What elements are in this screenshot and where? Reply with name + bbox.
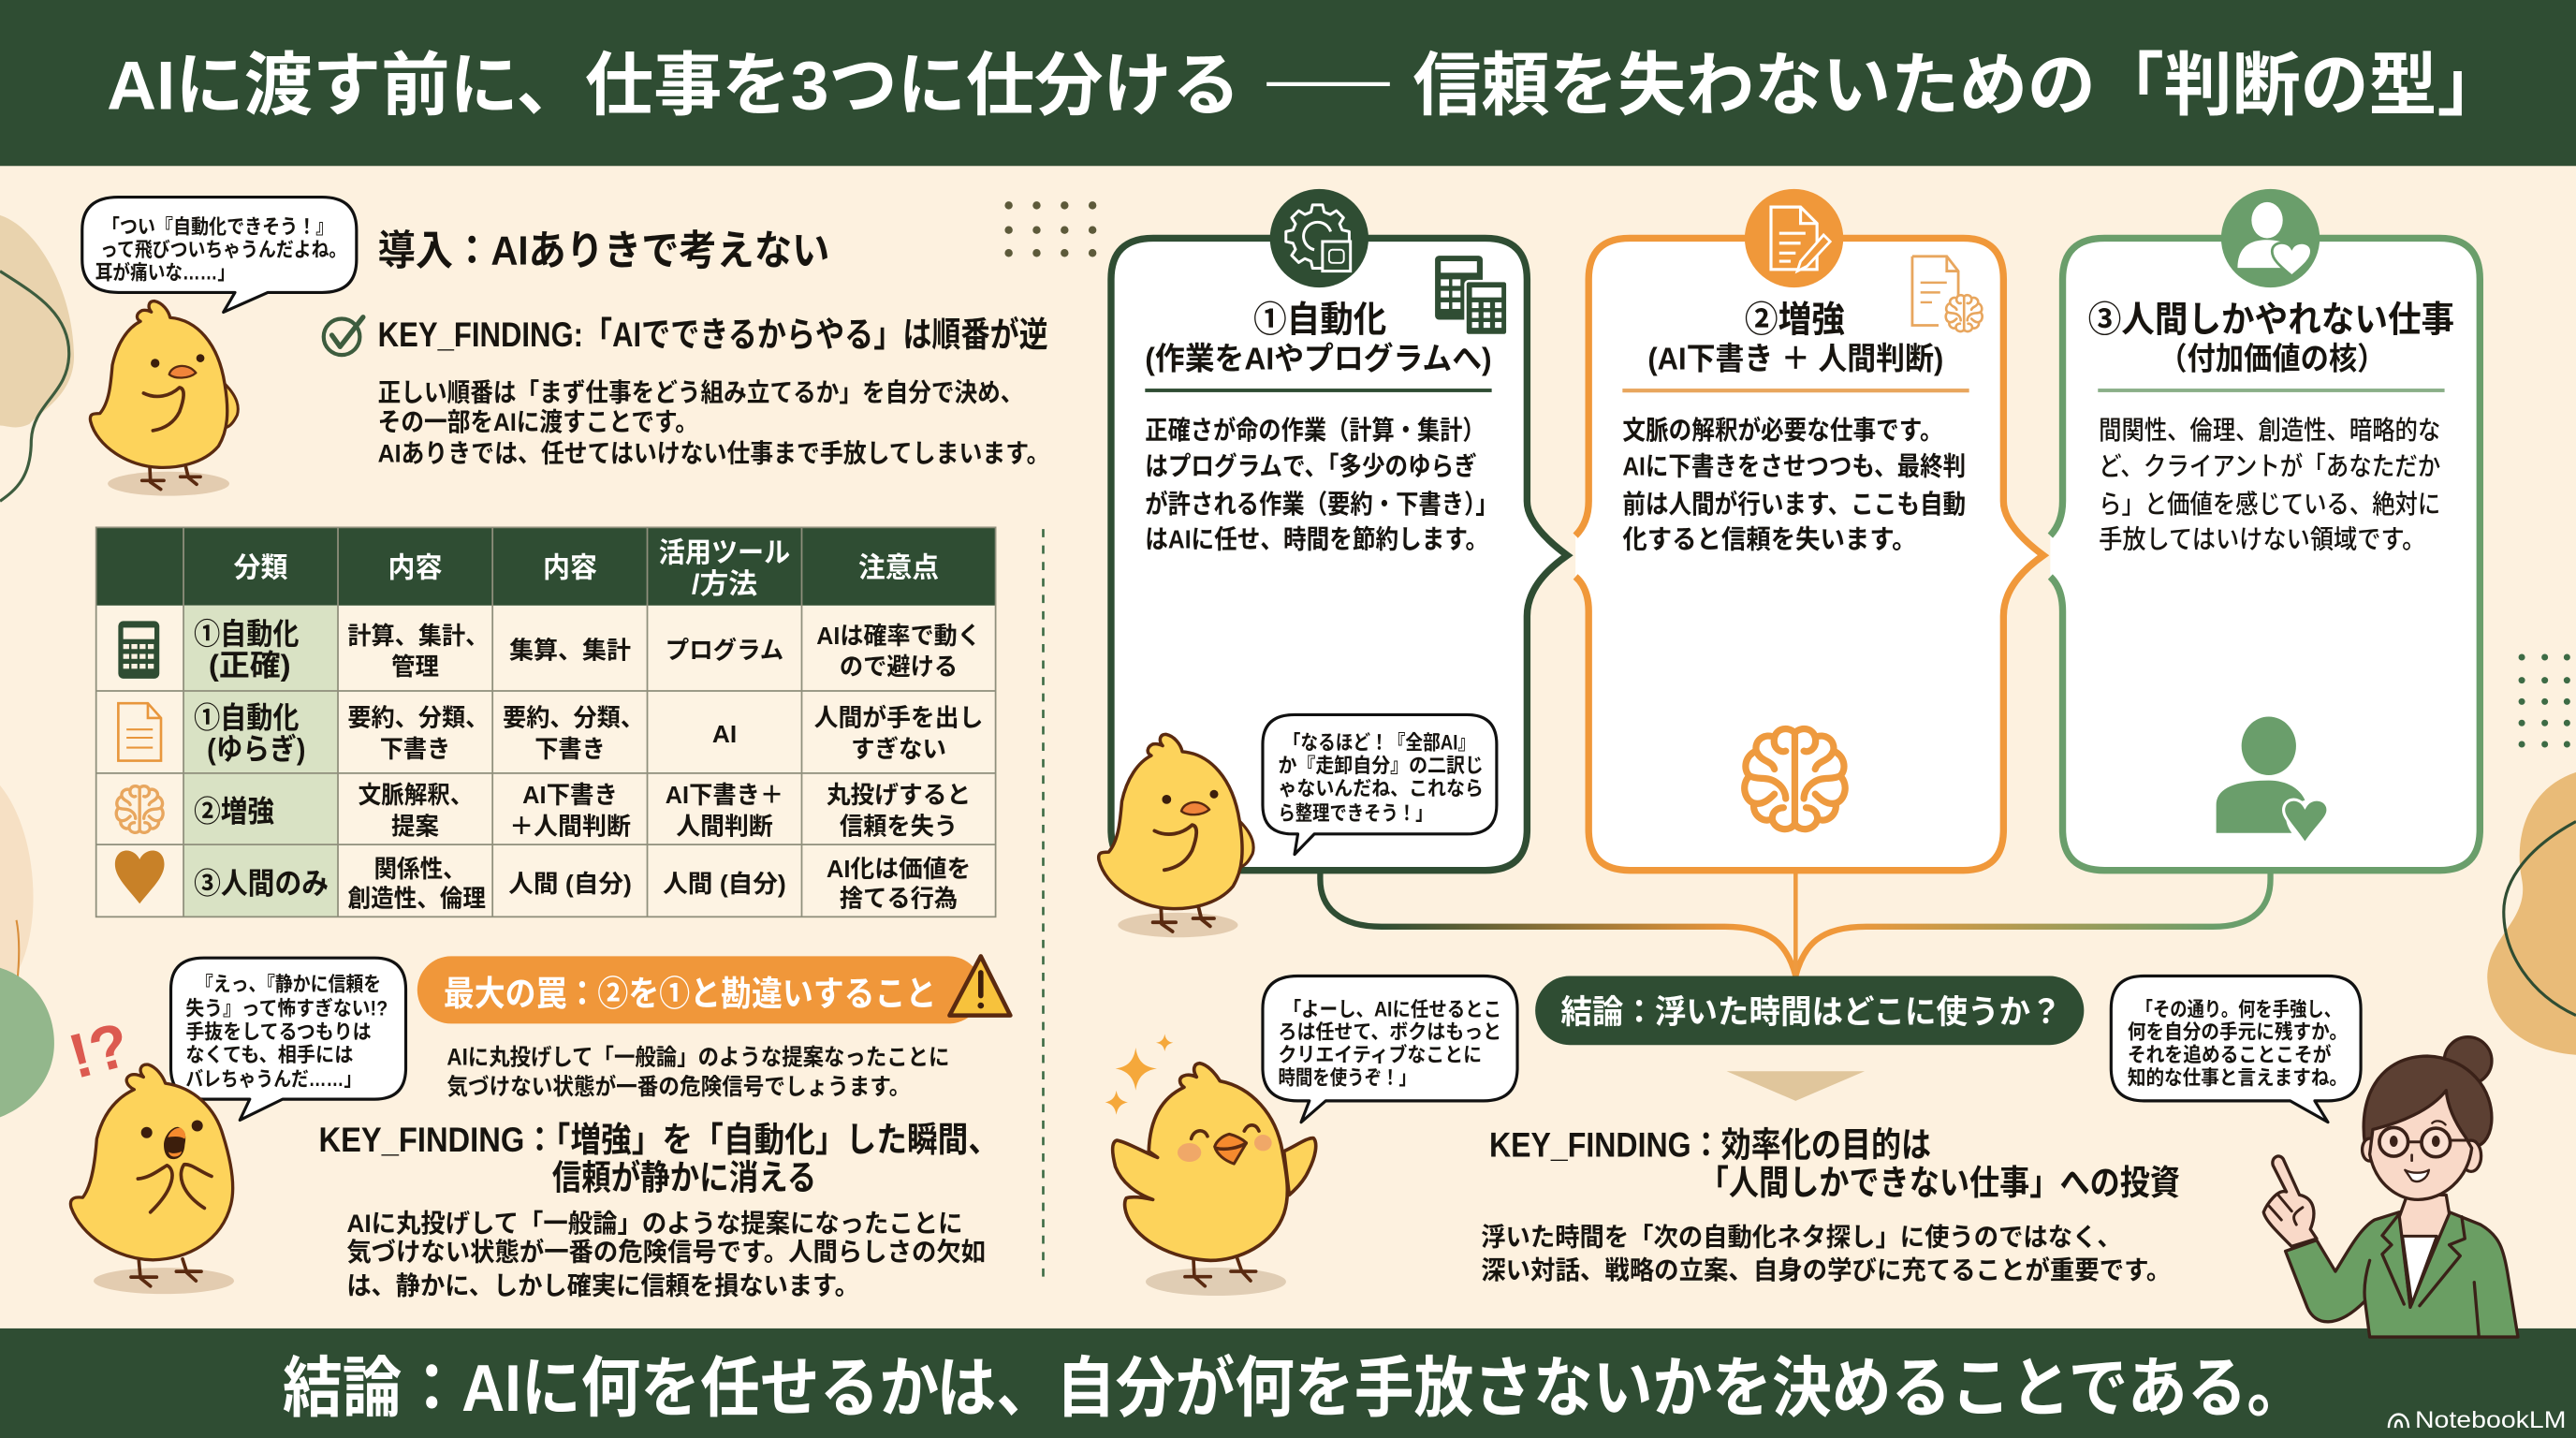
icon: sparkles <box>1105 1034 1173 1115</box>
row 2 <box>118 701 983 766</box>
icon: brain large <box>1745 729 1845 829</box>
row 2: AI <box>712 720 737 748</box>
icon: brain <box>116 786 163 832</box>
heading: ①自動化 <box>1253 300 1386 340</box>
vertical dashed divider <box>1042 529 1044 1282</box>
intro body <box>378 378 1050 468</box>
table header: 活用ツール <box>659 538 790 569</box>
row 1: 計算、集計、 <box>347 622 489 650</box>
row 1: AIは確率で動く <box>816 622 981 650</box>
row 2: すぎない <box>851 735 946 763</box>
icon: surprise marks: !? <box>62 1010 137 1093</box>
connector lines <box>1320 868 2271 976</box>
row 3: 信頼を失う <box>840 812 958 840</box>
speech bubble happy: クリエイティブなことに <box>1278 1043 1482 1066</box>
panel: augmentation <box>1575 189 2043 871</box>
speech bubble surprised: 『えっ、『静かに信頼を <box>196 972 381 995</box>
intro body: 正しい順番は「まず仕事をどう組み立てるか」を自分で決め、 <box>378 378 1023 407</box>
heading: ②増強 <box>1745 300 1845 340</box>
row 2: 下書き <box>380 735 450 763</box>
body: AIに下書きをさせつつも、最終判 <box>1622 452 1966 481</box>
badge: document with pencil <box>1745 189 1843 287</box>
row 3: AI下書き <box>522 781 618 809</box>
intro body: その一部をAIに渡すことです。 <box>378 407 698 436</box>
icon: document <box>118 703 161 761</box>
row 2: 人間が手を出し <box>814 704 983 732</box>
icon: person with heart <box>2217 717 2328 844</box>
body: 文脈の解釈が必要な仕事です。 <box>1622 415 1943 445</box>
speech bubble happy: ろは任せて、ボクはもっと <box>1278 1020 1501 1043</box>
speech bubble surprised: なくても、相手には <box>185 1043 354 1066</box>
row 1: 集算、集計 <box>509 637 631 665</box>
check icon <box>324 317 363 355</box>
table header: 内容 <box>543 552 597 583</box>
body <box>2099 416 2440 554</box>
decorative blobs right <box>2487 772 2576 1055</box>
row 1: 管理 <box>391 653 439 681</box>
subheading: （付加価値の核） <box>2159 343 2385 376</box>
row 1: ので避ける <box>840 653 958 681</box>
trap body: AIに丸投げして「一般論」のような提案なったことに <box>446 1044 949 1070</box>
conclusion text: 結論：AIに何を任せるかは、自分が何を手放さないかを決めることである。 <box>283 1351 2306 1425</box>
row 1: ①自動化 <box>194 617 299 651</box>
row 3: 丸投げすると <box>827 781 971 809</box>
speech bubble teacher: 「その通り。何を手強し、 <box>2136 998 2341 1021</box>
key finding left: 信頼が静かに消える <box>552 1159 816 1197</box>
row 4: 捨てる行為 <box>840 885 958 913</box>
row 1: プログラム <box>666 637 783 665</box>
row 1 <box>118 617 981 682</box>
body: 間関性、倫理、創造性、暗略的な <box>2099 416 2440 445</box>
speech bubble thinking: か『走卸自分』の二訳じ <box>1278 754 1484 777</box>
icon: document and brain <box>1912 257 1983 331</box>
row 2: 下書き <box>534 735 606 763</box>
body: 手放してはいけない領域です。 <box>2099 525 2425 554</box>
row 3: 提案 <box>391 812 439 840</box>
table header: 内容 <box>388 552 443 583</box>
key finding right body: 深い対話、戦略の立案、自身の学びに充てることが重要です。 <box>1481 1255 2171 1284</box>
orange trap callout: 最大の罠：②を①と勘違いすること <box>444 975 936 1013</box>
body <box>1145 415 1499 554</box>
body: 化すると信頼を失います。 <box>1622 525 1917 554</box>
icon: heart <box>115 851 165 903</box>
dot grid right <box>2519 654 2570 748</box>
speech bubble teacher: 何を自分の手元に残すか。 <box>2128 1020 2348 1043</box>
speech bubble happy <box>1263 976 1517 1123</box>
row 4: AI化は価値を <box>827 855 971 883</box>
conclusion pill: 結論：浮いた時間はどこに使うか？ <box>1560 994 2062 1031</box>
row 2: 要約、分類、 <box>503 704 644 732</box>
row 4: 人間 (自分) <box>663 870 786 898</box>
body: はプログラムで、「多少のゆらぎ <box>1145 451 1477 481</box>
speech bubble intro <box>82 198 357 312</box>
conclusion pill <box>1535 976 2084 1045</box>
speech bubble thinking: ら整理できそう！」 <box>1278 801 1432 825</box>
key finding right <box>1489 1125 2180 1202</box>
speech bubble intro: 「つい『自動化できそう！』 <box>102 214 333 238</box>
key finding left: KEY_FINDING：「増強」を「自動化」した瞬間、 <box>318 1121 999 1159</box>
decorative blobs left <box>0 215 74 1117</box>
icon: warning triangle <box>949 956 1010 1016</box>
row 3: 文脈解釈、 <box>359 781 473 809</box>
title band: 信頼を失わないための「判断の型」 <box>1412 46 2506 124</box>
panel: automation <box>1111 189 1567 871</box>
key finding right body <box>1481 1223 2171 1284</box>
key finding left body: AIに丸投げして「一般論」のような提案になったことに <box>346 1209 962 1238</box>
trap body <box>446 1044 949 1100</box>
body: ど、クライアントが「あなただか <box>2099 452 2440 481</box>
speech bubble teacher: それを追めることこそが <box>2128 1043 2332 1066</box>
icon: calculator <box>118 621 159 679</box>
table header <box>234 538 939 600</box>
speech bubble happy: 「よーし、AIに任せるとこ <box>1283 998 1501 1021</box>
bottom conclusion band <box>0 1328 2576 1438</box>
table header: /方法 <box>692 569 757 600</box>
key finding right: 「人間しかできない仕事」への投資 <box>1699 1164 2180 1202</box>
intro heading: 導入：AIありきで考えない <box>378 228 829 274</box>
row 4: ③人間のみ <box>194 866 329 900</box>
speech bubble surprised: バレちゃうんだ……」 <box>185 1067 361 1091</box>
subheading: (作業をAIやプログラムへ) <box>1145 343 1492 376</box>
heading: ③人間しかやれない仕事 <box>2088 300 2454 340</box>
title band <box>0 0 2576 166</box>
speech bubble thinking <box>1263 714 1497 855</box>
row 3 <box>116 781 971 840</box>
row 4 <box>115 851 971 913</box>
table header: 注意点 <box>858 552 939 583</box>
row 3: 人間判断 <box>676 812 773 840</box>
row 1: (正確) <box>209 648 291 682</box>
body: 前は人間が行います、ここも自動 <box>1622 489 1966 519</box>
speech bubble surprised <box>171 958 406 1120</box>
subheading: (AI下書き ＋ 人間判断) <box>1647 343 1943 376</box>
key finding left body: は、静かに、しかし確実に信頼を損ないます。 <box>346 1270 859 1299</box>
teacher character <box>2263 1037 2518 1337</box>
row 2: (ゆらぎ) <box>207 732 305 766</box>
speech bubble happy: 時間を使うぞ！」 <box>1278 1065 1416 1089</box>
speech bubble intro: 耳が痛いな……」 <box>95 260 235 284</box>
row 3: ＋人間判断 <box>509 812 631 840</box>
row 4: 関係性、 <box>373 855 466 883</box>
row 3: AI下書き＋ <box>666 781 783 809</box>
speech bubble surprised: 失う』って怖すぎない!? <box>185 997 388 1020</box>
down arrow <box>1727 1071 1865 1101</box>
speech bubble thinking: 「なるほど！『全部AI』 <box>1283 730 1475 754</box>
NotebookLM mark: NotebookLM <box>2415 1408 2566 1433</box>
thinking chick <box>1099 734 1253 937</box>
body: が許される作業（要約・下書き）」 <box>1145 489 1499 519</box>
key finding left <box>318 1121 999 1197</box>
speech bubble teacher: 知的な仕事と言えますね。 <box>2128 1065 2348 1089</box>
speech bubble teacher <box>2111 976 2361 1123</box>
key finding right body: 浮いた時間を「次の自動化ネタ探し」に使うのではなく、 <box>1481 1223 2122 1252</box>
intro chick <box>90 301 238 496</box>
speech bubble intro: って飛びついちゃうんだよね。 <box>100 238 346 261</box>
badge: human <box>2221 189 2320 287</box>
trap body: 気づけない状態が一番の危険信号でしょうます。 <box>446 1073 910 1100</box>
orange trap callout <box>417 956 1010 1023</box>
table header: 分類 <box>234 552 288 583</box>
comparison table <box>96 527 996 917</box>
row 2: ①自動化 <box>194 701 299 735</box>
body: はAIに任せ、時間を節約します。 <box>1145 525 1488 554</box>
key finding left body: 気づけない状態が一番の危険信号です。人間らしさの欠如 <box>346 1237 986 1266</box>
body: 正確さが命の作業（計算・集計） <box>1145 415 1486 445</box>
key finding right: KEY_FINDING：効率化の目的は <box>1489 1125 1931 1164</box>
title text: AIに渡す前に、仕事を3つに仕分ける <box>107 46 1240 124</box>
happy chick <box>1105 1034 1316 1296</box>
speech bubble thinking: ゃないんだね、これなら <box>1278 777 1484 800</box>
row 4: 人間 (自分) <box>508 870 632 898</box>
speech bubble surprised: 手抜をしてるつもりは <box>185 1020 372 1043</box>
row 4: 創造性、倫理 <box>348 885 486 913</box>
row 2: 要約、分類、 <box>347 704 489 732</box>
surprised chick <box>70 1064 234 1294</box>
icon: calculators <box>1435 256 1507 335</box>
row 3: ②増強 <box>194 795 274 829</box>
intro body: AIありきでは、任せてはいけない仕事まで手放してしまいます。 <box>378 439 1050 468</box>
dot grid top <box>1004 201 1096 257</box>
key finding intro: KEY_FINDING:「AIでできるからやる」は順番が逆 <box>378 315 1048 354</box>
key finding left body <box>346 1209 986 1299</box>
body: ら」と価値を感じている、絶対に <box>2099 490 2440 519</box>
panel: human-only <box>2050 189 2480 871</box>
badge: gear with chip <box>1270 189 1368 287</box>
body <box>1622 415 1966 554</box>
